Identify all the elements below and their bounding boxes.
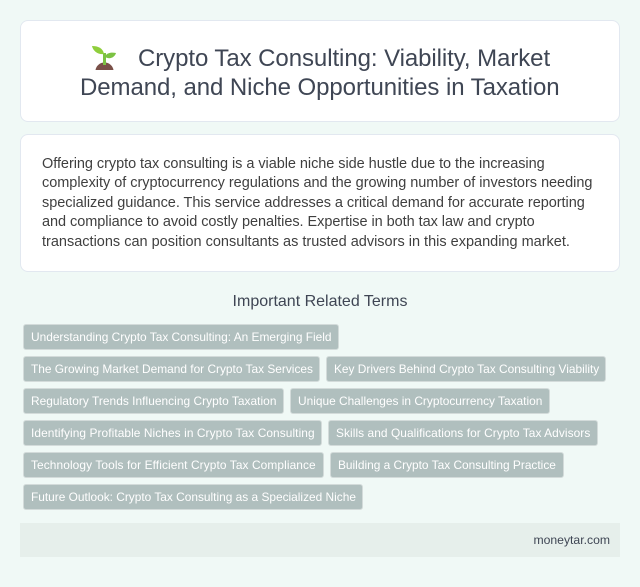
tag: Identifying Profitable Niches in Crypto Tax Consulting <box>31 426 315 440</box>
text block: description <box>42 156 592 250</box>
tag: Technology Tools for Efficient Crypto Tax Compliance <box>31 458 316 472</box>
tag <box>23 420 322 446</box>
tag: The Growing Market Demand for Crypto Tax Services <box>31 362 313 376</box>
heading: important related terms: Important Related Terms <box>233 293 407 310</box>
text block: description: and compliance to avoid costly penalties. Expertise in both tax law and crypto <box>42 214 535 230</box>
tag <box>330 452 564 478</box>
tag <box>326 356 606 382</box>
text block: description: transactions can position consultants as trusted advisors in this expanding market. <box>42 234 570 250</box>
tag: Skills and Qualifications for Crypto Tax Advisors <box>336 426 590 440</box>
tag: Building a Crypto Tax Consulting Practice <box>338 458 556 472</box>
panel: related term tags <box>23 324 606 510</box>
title: Demand, and Niche Opportunities in Taxation <box>80 74 560 101</box>
tag: Key Drivers Behind Crypto Tax Consulting Viability <box>334 362 599 376</box>
title card <box>20 20 620 122</box>
text block: description: specialized guidance. This service addresses a critical demand for accurate reporting <box>42 195 585 211</box>
tag <box>23 484 363 510</box>
tag <box>23 452 324 478</box>
tag <box>328 420 598 446</box>
tag <box>23 388 284 414</box>
text block: description: complexity of cryptocurrency regulations and the growing number of investors needing <box>42 175 592 191</box>
title: Crypto Tax Consulting: Viability, Market <box>138 45 550 72</box>
tag: Understanding Crypto Tax Consulting: An Emerging Field <box>31 330 332 344</box>
footer bar <box>20 523 620 557</box>
panel: description paragraph <box>20 134 620 272</box>
footer text: moneytar.com: moneytar.com <box>533 533 610 547</box>
icon: seedling <box>92 46 116 70</box>
tag: Unique Challenges in Cryptocurrency Taxation <box>298 394 542 408</box>
text block: description: Offering crypto tax consulting is a viable niche side hustle due to the increasing <box>42 156 545 172</box>
tag <box>290 388 550 414</box>
tag <box>23 356 320 382</box>
tag: Future Outlook: Crypto Tax Consulting as a Specialized Niche <box>31 490 356 504</box>
tag: Regulatory Trends Influencing Crypto Taxation <box>31 394 276 408</box>
tag <box>23 324 339 350</box>
title <box>80 45 560 101</box>
